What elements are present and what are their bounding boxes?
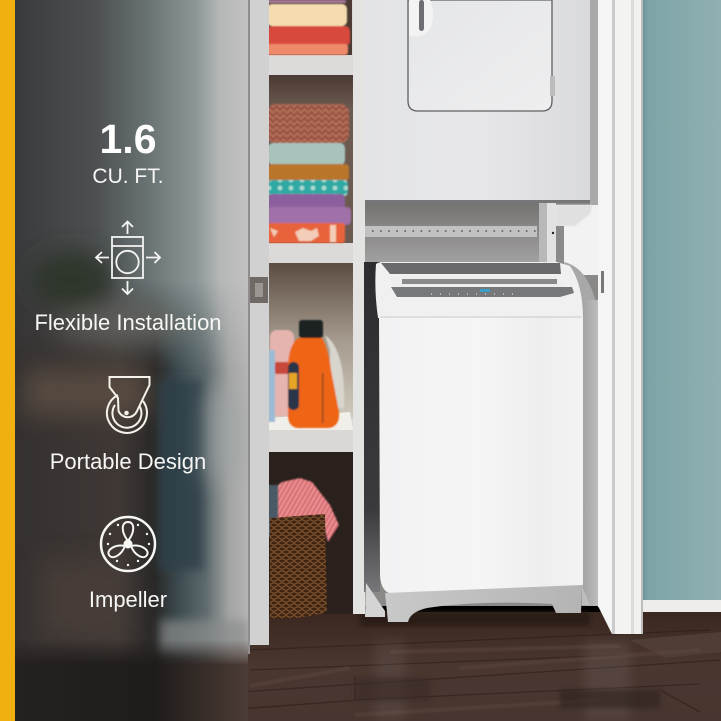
label: portable design: Portable Design: [50, 449, 206, 474]
frosted left panel: [15, 0, 248, 721]
capacity unit: CU. FT.: [92, 165, 164, 188]
niche under dryer: [365, 203, 598, 330]
capacity heading: [92, 116, 164, 188]
folded towels: [267, 0, 351, 243]
dryer door handle: [409, 0, 433, 37]
washer lid and control panel: [375, 262, 583, 318]
shelf door edge and latch: [246, 0, 269, 654]
dryer: [365, 0, 590, 203]
capacity value: 1.6: [100, 116, 156, 162]
washer: [365, 262, 590, 622]
icon: flexible installation: [94, 220, 162, 296]
floor: [240, 612, 721, 721]
laundry basket: [268, 478, 339, 618]
side gap beside washer: [364, 262, 380, 592]
label: flexible installation: Flexible Installation: [34, 310, 222, 335]
baseboard: [643, 600, 721, 633]
icon: portable design caster: [106, 376, 150, 434]
dryer door: [408, 0, 552, 111]
detergent bottles: [268, 320, 344, 428]
closet back: [360, 0, 600, 606]
right wall: [640, 0, 721, 605]
washer base: [385, 585, 582, 622]
door trim: [590, 0, 643, 634]
icon: impeller: [100, 516, 156, 572]
yellow accent bar: [0, 0, 15, 721]
label: impeller: Impeller: [89, 587, 167, 612]
shelving unit: [268, 0, 365, 614]
